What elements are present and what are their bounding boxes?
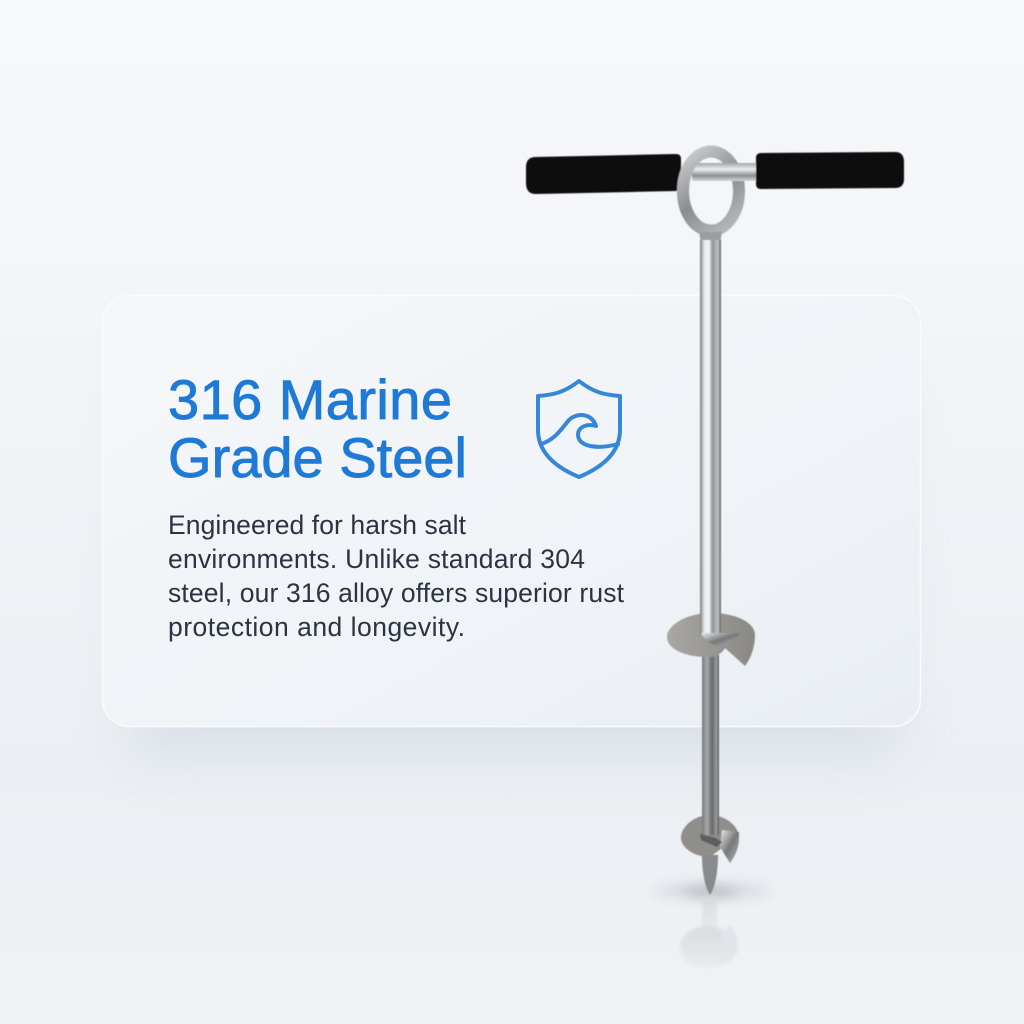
eye ring back — [683, 152, 739, 230]
upper auger disc — [667, 613, 755, 666]
body text: Engineered for harsh salt — [168, 510, 467, 540]
lower shaft — [702, 655, 719, 835]
body text: steel, our 316 alloy offers superior rust — [168, 578, 625, 608]
body text: protection and longevity. — [168, 612, 465, 642]
body text: environments. Unlike standard 304 — [168, 544, 585, 574]
upper weld — [701, 633, 740, 646]
icon: shield with wave — [538, 381, 620, 477]
left foam grip — [526, 154, 681, 194]
reflection of anchor tip — [680, 897, 738, 968]
lower auger disc — [681, 815, 739, 863]
title: 316 Marine — [168, 368, 452, 431]
right foam grip — [756, 152, 904, 189]
title: Grade Steel — [168, 426, 467, 489]
product: ground anchor — [526, 152, 904, 895]
upper shaft — [700, 240, 721, 635]
ground shadow — [654, 887, 770, 895]
crossbar rod — [692, 163, 758, 181]
pointed tip — [702, 855, 718, 895]
ring neck — [699, 232, 722, 244]
lower weld — [700, 834, 722, 847]
panel: glass card — [102, 296, 920, 755]
eye ring front left arc — [683, 152, 711, 230]
lower flange highlight — [720, 830, 739, 863]
